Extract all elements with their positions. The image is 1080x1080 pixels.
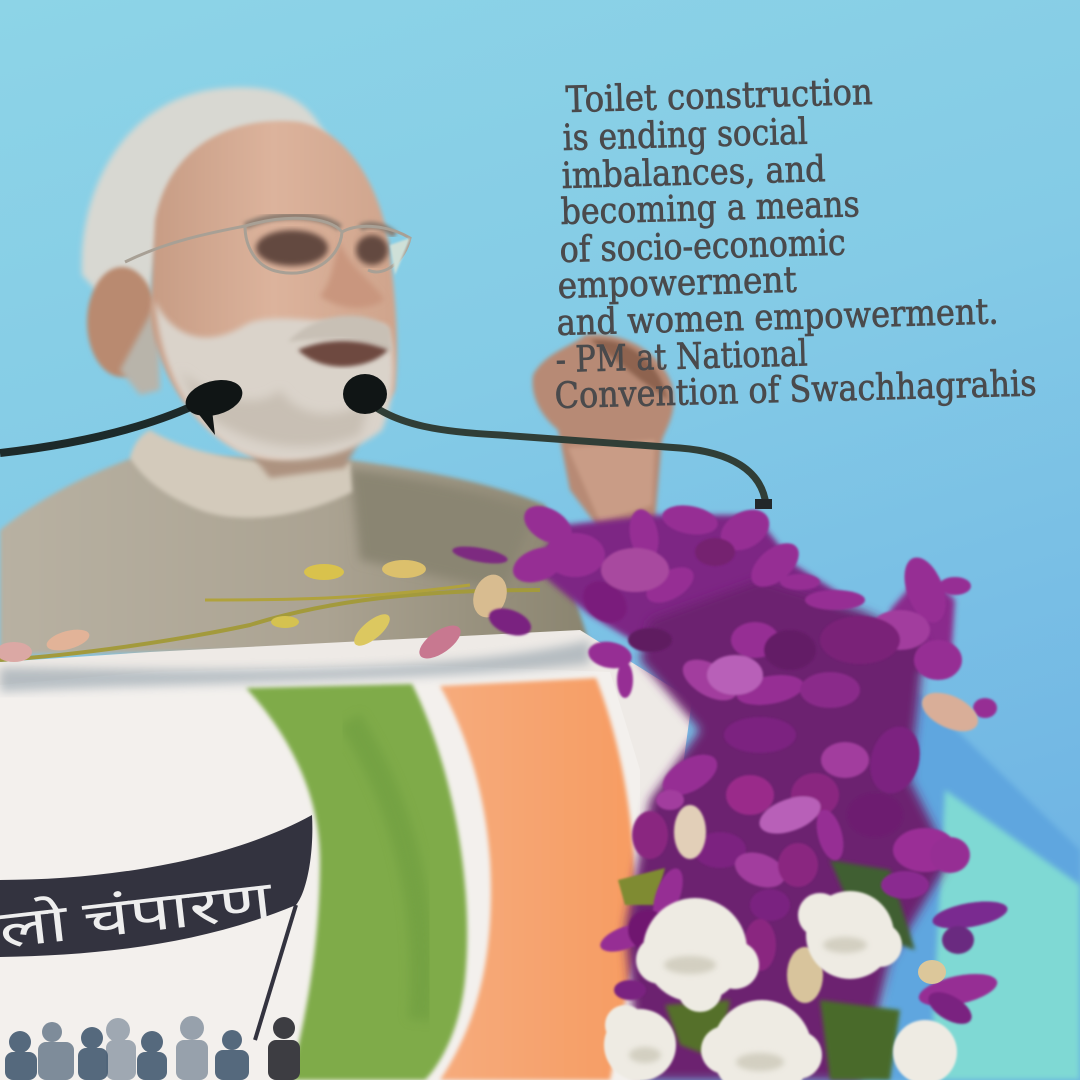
quote text: of socio-economic	[559, 223, 846, 271]
speaker body: kurta	[0, 430, 590, 655]
quote text: - PM at National	[555, 333, 808, 381]
moustache	[288, 316, 392, 352]
logo banner	[0, 815, 312, 968]
ear	[87, 267, 157, 377]
teal stage corner	[880, 690, 1080, 1080]
quote text: imbalances, and	[561, 149, 826, 197]
neck	[240, 420, 370, 478]
raised fist	[532, 334, 674, 530]
orchid bouquet	[451, 498, 1010, 1080]
quote text: is ending social	[562, 112, 808, 159]
hair	[82, 87, 330, 300]
face	[150, 121, 397, 459]
glasses	[125, 218, 410, 273]
quote text: Toilet construction	[565, 72, 873, 121]
quote text: becoming a means	[560, 184, 860, 233]
crowd silhouettes	[5, 1016, 300, 1080]
leaves	[830, 860, 915, 950]
beard	[155, 300, 393, 460]
right cluster base	[890, 570, 955, 675]
main base	[625, 580, 950, 1080]
quote text: and women empowerment.	[556, 291, 999, 344]
brows	[245, 216, 395, 235]
lectern	[0, 630, 692, 1080]
quote text	[554, 72, 1037, 417]
orchid branch	[0, 560, 540, 665]
pale buds	[916, 685, 984, 739]
green swoosh	[246, 684, 467, 1080]
nose	[320, 240, 384, 308]
carnation shading	[629, 937, 867, 1071]
mouth	[298, 341, 388, 367]
right microphone	[343, 374, 772, 509]
sideburn hair	[120, 300, 160, 395]
logo pole	[255, 905, 296, 1040]
purple petals	[451, 498, 1010, 1030]
quote text: empowerment	[557, 260, 798, 307]
collar	[130, 430, 352, 518]
eyes	[256, 230, 328, 266]
upper cluster base	[530, 515, 850, 645]
left microphone	[0, 374, 246, 453]
head	[82, 87, 410, 478]
white carnations	[604, 891, 957, 1080]
orange swoosh	[440, 678, 636, 1080]
